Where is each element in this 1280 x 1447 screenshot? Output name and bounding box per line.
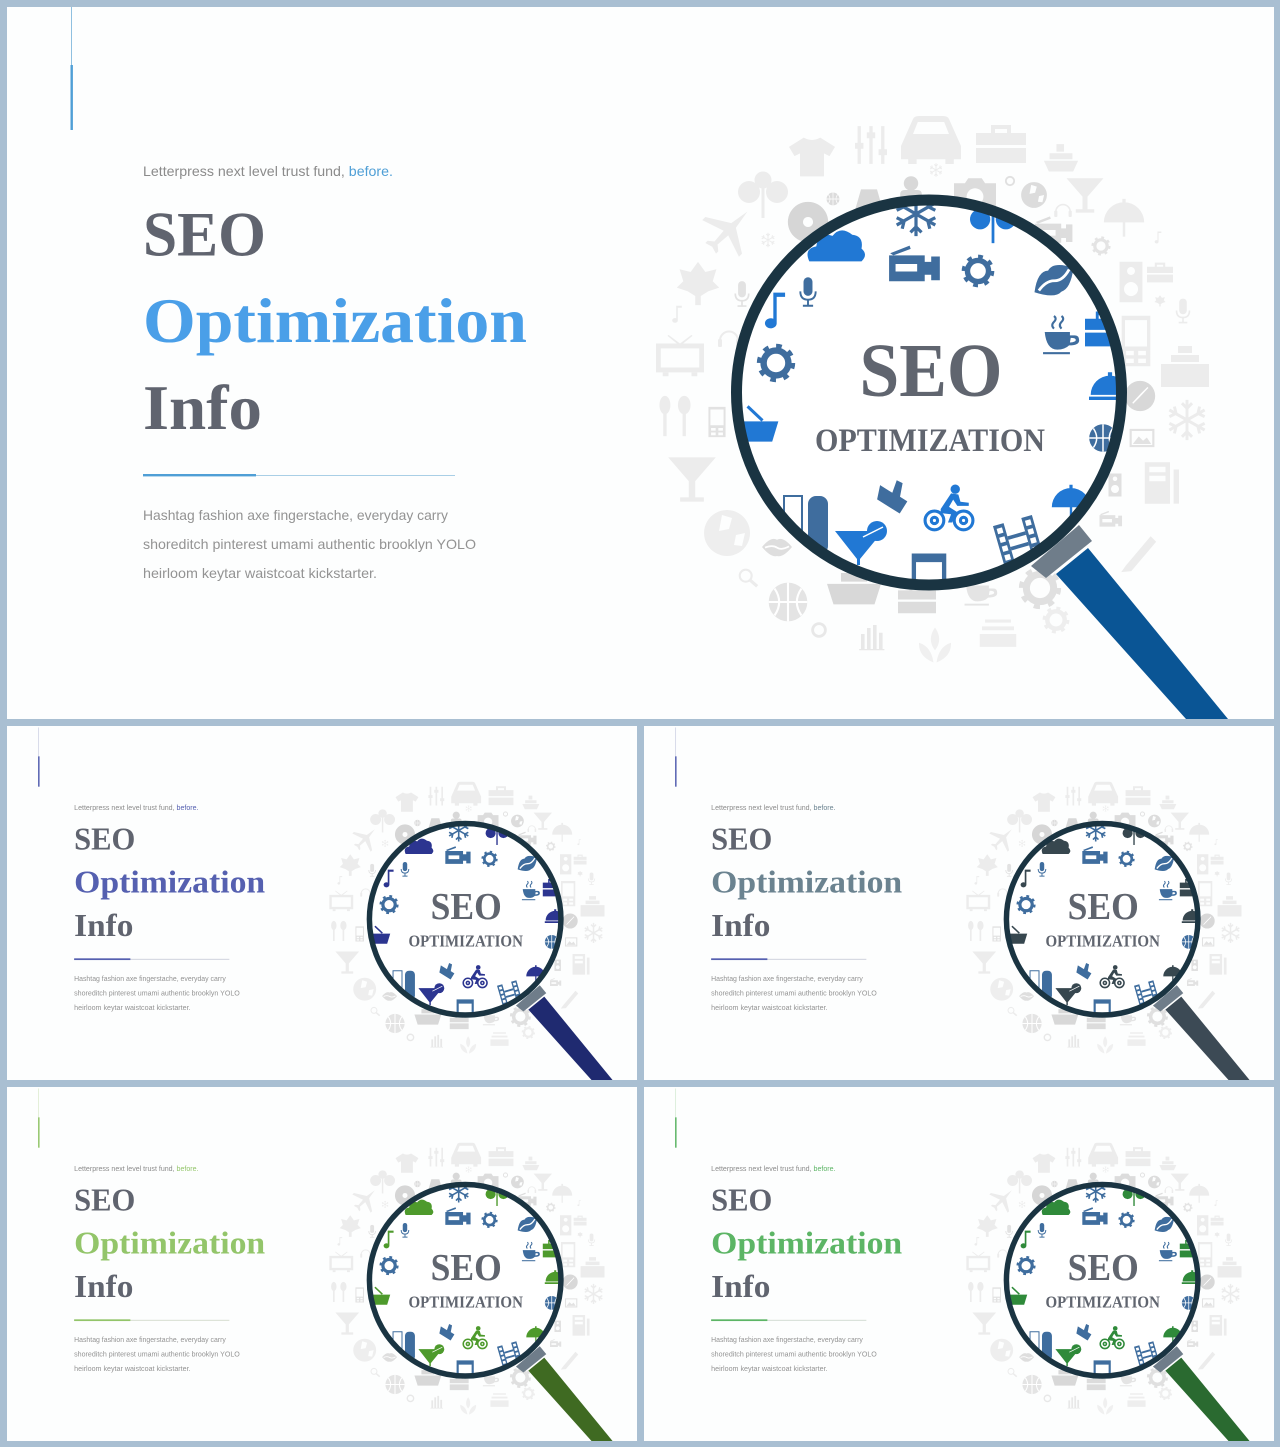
slide text: Info <box>74 908 133 943</box>
body text: Hashtag fashion axe fingerstache, everyday carry <box>143 507 448 523</box>
slide text: Hashtag fashion axe fingerstache, everyday carry <box>74 1337 226 1344</box>
panel: main blue slide <box>7 7 1274 719</box>
body text <box>143 507 476 581</box>
body text: heirloom keytar waistcoat kickstarter. <box>143 565 377 581</box>
title underline <box>143 474 455 476</box>
icon: gear <box>964 257 992 285</box>
slide text: OPTIMIZATION <box>408 1292 523 1311</box>
lens text: SEO: SEO <box>860 329 1002 413</box>
slide text <box>38 727 523 1012</box>
icon: music note <box>765 293 785 328</box>
title: SEO: SEO <box>143 198 266 270</box>
magnifier illustration <box>656 116 1228 719</box>
slide text: OPTIMIZATION <box>1045 931 1160 950</box>
icon: basketball <box>1089 424 1117 452</box>
icon: thumbs up <box>873 474 914 514</box>
main slide background <box>7 7 1274 719</box>
panel: slate slide <box>644 726 1274 1082</box>
slide text <box>38 1088 523 1373</box>
slide text: Letterpress next level trust fund, before. <box>711 1166 836 1173</box>
slide text: OPTIMIZATION <box>1045 1292 1160 1311</box>
icon: microphone <box>800 277 816 307</box>
icon: bag <box>1085 311 1121 346</box>
slide text: Optimization <box>711 865 902 900</box>
slide text <box>675 727 1160 1012</box>
icon: cloud <box>808 230 865 261</box>
slide text: shoreditch pinterest umami authentic brooklyn YOLO <box>74 1352 240 1359</box>
slide text: OPTIMIZATION <box>408 931 523 950</box>
slide text: SEO <box>711 1182 772 1217</box>
icon: cocktail <box>835 521 887 565</box>
icon: umbrella <box>1052 485 1090 521</box>
icon: video camera <box>889 246 940 281</box>
slide text: Hashtag fashion axe fingerstache, everyday carry <box>74 976 226 983</box>
slide text: Info <box>74 1269 133 1304</box>
icon: cloche <box>1089 372 1131 400</box>
icon: recycle lips <box>1028 257 1081 304</box>
icon: coffee cup <box>1043 316 1079 354</box>
magnifier illustration <box>966 782 1251 1082</box>
slide text: heirloom keytar waistcoat kickstarter. <box>74 1005 191 1012</box>
slide text: Hashtag fashion axe fingerstache, everyday carry <box>711 1337 863 1344</box>
lens text: OPTIMIZATION: OPTIMIZATION <box>815 423 1045 459</box>
icon: film strip <box>993 515 1043 565</box>
eyebrow text: Letterpress next level trust fund, before. <box>143 163 393 179</box>
slide text: Letterpress next level trust fund, before. <box>74 1166 199 1173</box>
slide text: SEO <box>431 1247 502 1289</box>
magnifier handle <box>1056 548 1228 719</box>
magnifier illustration <box>329 1143 614 1443</box>
slide text: Optimization <box>74 865 265 900</box>
slide text: Letterpress next level trust fund, before. <box>74 805 199 812</box>
slide text: SEO <box>1068 1247 1139 1289</box>
slide text: shoreditch pinterest umami authentic brooklyn YOLO <box>711 991 877 998</box>
icon: device <box>784 496 828 554</box>
icon: motorbike <box>925 485 973 530</box>
slide text: shoreditch pinterest umami authentic brooklyn YOLO <box>711 1352 877 1359</box>
panel: green slide <box>644 1087 1274 1443</box>
lens white disc <box>735 198 1123 586</box>
accent vertical line <box>70 7 73 130</box>
icons seen through the lens <box>740 192 1131 587</box>
slide text: heirloom keytar waistcoat kickstarter. <box>74 1366 191 1373</box>
slide background <box>7 726 637 1080</box>
icon: fan <box>970 200 1016 243</box>
body text: shoreditch pinterest umami authentic brooklyn YOLO <box>143 536 476 552</box>
slide background <box>644 726 1274 1080</box>
slide text: heirloom keytar waistcoat kickstarter. <box>711 1366 828 1373</box>
icon cloud background <box>656 116 1209 662</box>
title: Info: Info <box>143 372 262 443</box>
slide text: SEO <box>74 1182 135 1217</box>
panel: indigo slide <box>7 726 637 1082</box>
magnifier illustration <box>966 1143 1251 1443</box>
slide background <box>7 1087 637 1441</box>
icon: frame <box>912 553 946 587</box>
icon: snowflake <box>897 192 935 236</box>
slide text: Info <box>711 1269 770 1304</box>
slide background <box>644 1087 1274 1441</box>
icon: basket <box>740 406 778 442</box>
title: Optimization: Optimization <box>143 285 527 356</box>
slide text: shoreditch pinterest umami authentic brooklyn YOLO <box>74 991 240 998</box>
slide text: Optimization <box>74 1226 265 1261</box>
icon: gear left <box>759 346 793 380</box>
slide text: heirloom keytar waistcoat kickstarter. <box>711 1005 828 1012</box>
slide text: Hashtag fashion axe fingerstache, everyday carry <box>711 976 863 983</box>
slide text: SEO <box>431 886 502 928</box>
magnifier illustration <box>329 782 614 1082</box>
magnifier rim <box>736 200 1122 585</box>
slide text: SEO <box>1068 886 1139 928</box>
slide text: SEO <box>711 821 772 856</box>
slide text: Optimization <box>711 1226 902 1261</box>
slide text: Letterpress next level trust fund, before. <box>711 805 836 812</box>
slide text: SEO <box>74 821 135 856</box>
panel: light green slide <box>7 1087 637 1443</box>
magnifier collar <box>1031 525 1092 578</box>
slide text <box>675 1088 1160 1373</box>
slide text: Info <box>711 908 770 943</box>
